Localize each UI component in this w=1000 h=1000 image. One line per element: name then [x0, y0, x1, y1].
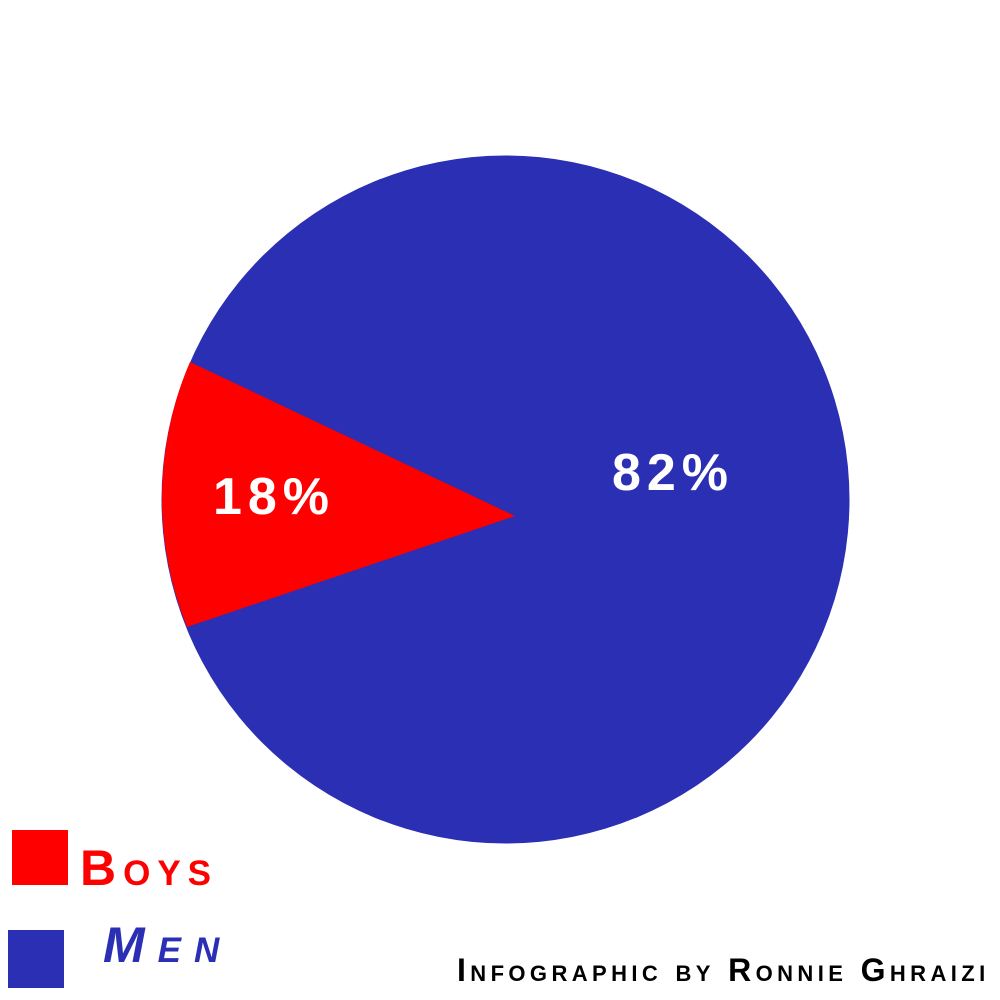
legend: boys label: Boys: [80, 840, 218, 896]
legend: boys swatch: [12, 830, 68, 885]
credit: Infographic by Ronnie Ghraizi: [457, 952, 990, 988]
legend: men label: Men: [103, 917, 232, 973]
label: 18%: 18%: [213, 468, 335, 526]
label: 82%: 82%: [612, 444, 734, 502]
slice: men: [162, 156, 850, 844]
slice: boys: [162, 362, 515, 627]
legend: men swatch: [8, 930, 64, 988]
